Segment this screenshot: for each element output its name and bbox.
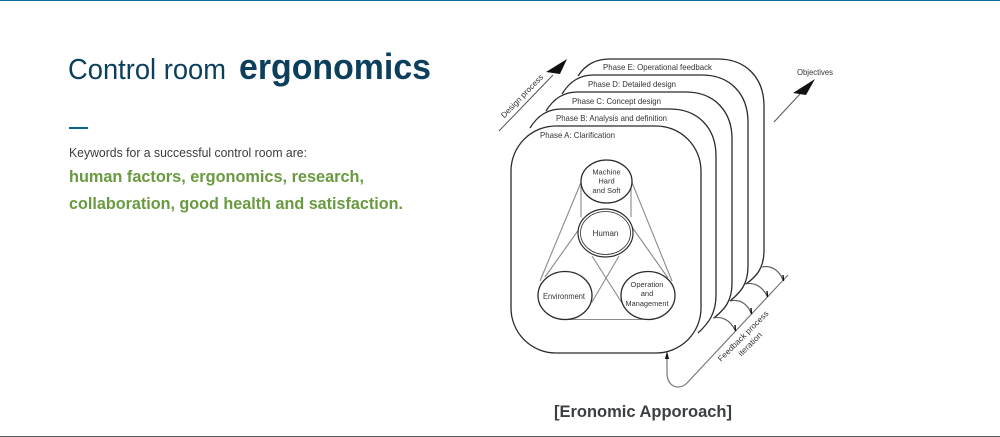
phase labels: Phase A: Clarification xyxy=(540,130,615,140)
feedback label: Feedback process xyxy=(716,309,770,363)
circle: operation and management: and xyxy=(641,289,653,298)
phase labels: Phase B: Analysis and definition xyxy=(556,113,667,123)
phase labels xyxy=(540,62,713,140)
phase C card xyxy=(546,92,732,318)
circle: operation and management xyxy=(621,272,675,320)
phase labels: Phase C: Concept design xyxy=(572,96,661,106)
keywords highlight: collaboration, good health and satisfaction. xyxy=(69,194,403,213)
arrow: objectives xyxy=(774,68,833,122)
circle: operation and management: Management xyxy=(626,299,669,308)
circle: machine xyxy=(581,160,632,203)
phase D card xyxy=(562,75,748,301)
connector lines xyxy=(540,180,672,320)
keywords highlight xyxy=(69,167,403,213)
circle: human xyxy=(578,209,633,257)
phase A card xyxy=(511,126,701,353)
phase B card xyxy=(530,109,716,333)
title: ergonomics xyxy=(239,46,431,87)
arrow: design process xyxy=(499,59,567,131)
phase cards stack xyxy=(511,59,764,353)
circle: machine: and Soft xyxy=(593,186,621,195)
circle: machine: Machine xyxy=(592,168,621,176)
phase labels: Phase D: Detailed design xyxy=(588,79,676,89)
intro text: Keywords for a successful control room are: xyxy=(69,145,307,160)
circle: environment xyxy=(538,272,592,320)
circle: operation and management: Operation xyxy=(631,280,663,289)
title xyxy=(68,46,431,87)
diagram caption: [Eronomic Apporoach] xyxy=(554,402,732,421)
arrow: objectives: Objectives xyxy=(797,68,833,77)
title: Control room xyxy=(68,54,226,86)
circle: human: Human xyxy=(593,229,618,238)
feedback label: iteration xyxy=(736,330,764,358)
accent dash xyxy=(69,127,88,129)
phase labels: Phase E: Operational feedback xyxy=(603,62,713,72)
feedback loop xyxy=(665,267,788,387)
circle: machine: Hard xyxy=(598,176,615,186)
phase E card xyxy=(578,59,764,284)
diagram: ergonomic approach xyxy=(499,59,833,387)
circle: environment: Environment xyxy=(543,292,586,301)
arrow: design process: Design process xyxy=(499,73,545,120)
keywords highlight: human factors, ergonomics, research, xyxy=(69,167,364,186)
